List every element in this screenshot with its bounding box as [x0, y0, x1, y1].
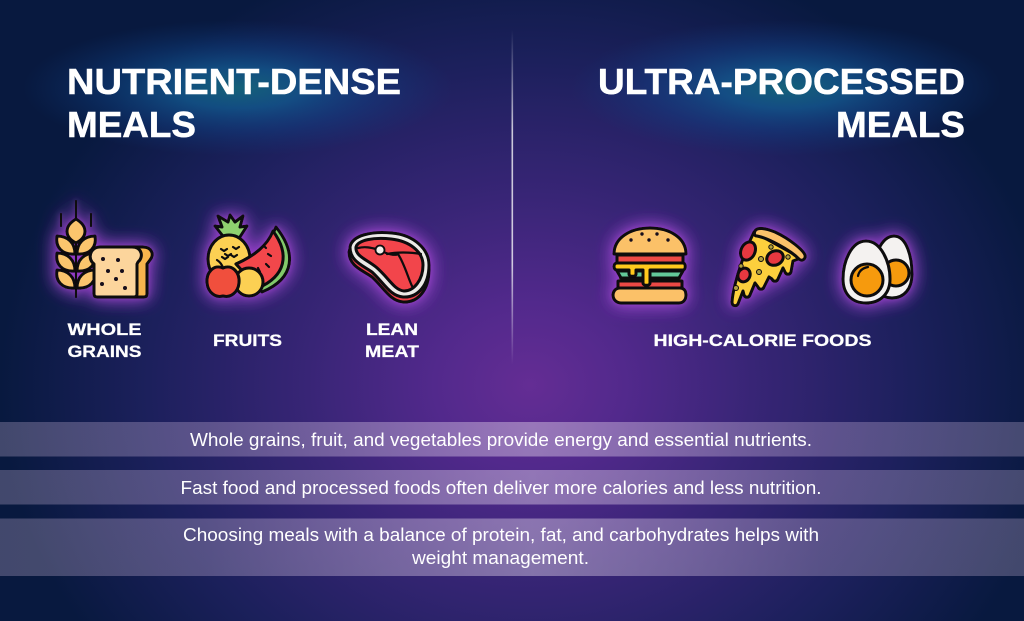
centre divider	[512, 30, 513, 365]
callout bar 3: weight management.	[411, 548, 589, 568]
callout bar 2	[0, 470, 1024, 504]
label: whole grains	[68, 320, 142, 361]
heading: nutrient-dense meals	[67, 61, 401, 145]
panel: ultra-processed meals	[598, 61, 965, 350]
icon: pizza slice	[732, 228, 805, 306]
icon: wheat and bread	[57, 201, 152, 297]
panel: key points	[0, 422, 1024, 576]
callout bar 3: Choosing meals with a balance of protein, fat, and carbohydrates helps with	[183, 525, 819, 545]
icon: burger	[613, 228, 686, 303]
heading: ultra-processed meals: ULTRA-PROCESSED	[598, 61, 965, 102]
callout bar 1: Whole grains, fruit, and vegetables provide energy and essential nutrients.	[190, 430, 812, 450]
label: whole grains: WHOLE	[68, 320, 142, 339]
callout bar 1	[0, 422, 1024, 456]
heading: ultra-processed meals	[598, 61, 965, 145]
label: fruits: FRUITS	[213, 331, 282, 350]
glow: left heading	[23, 20, 453, 156]
heading: ultra-processed meals: MEALS	[836, 104, 965, 145]
label: whole grains: GRAINS	[68, 342, 142, 361]
panel: nutrient-dense meals	[57, 61, 429, 361]
label: lean meat: MEAT	[365, 342, 420, 361]
heading: nutrient-dense meals: MEALS	[67, 104, 196, 145]
heading: nutrient-dense meals: NUTRIENT-DENSE	[67, 61, 401, 102]
icon: boiled eggs	[843, 236, 912, 303]
label: high-calorie foods: HIGH-CALORIE FOODS	[654, 331, 872, 350]
callout bar 2: Fast food and processed foods often deliver more calories and less nutrition.	[180, 478, 822, 498]
icon: lean meat steak	[349, 233, 429, 302]
label: lean meat	[365, 320, 420, 361]
icon: fruits	[207, 215, 290, 296]
callout bar 3	[0, 518, 1024, 576]
glow: right heading	[571, 20, 1001, 156]
label: lean meat: LEAN	[366, 320, 418, 339]
